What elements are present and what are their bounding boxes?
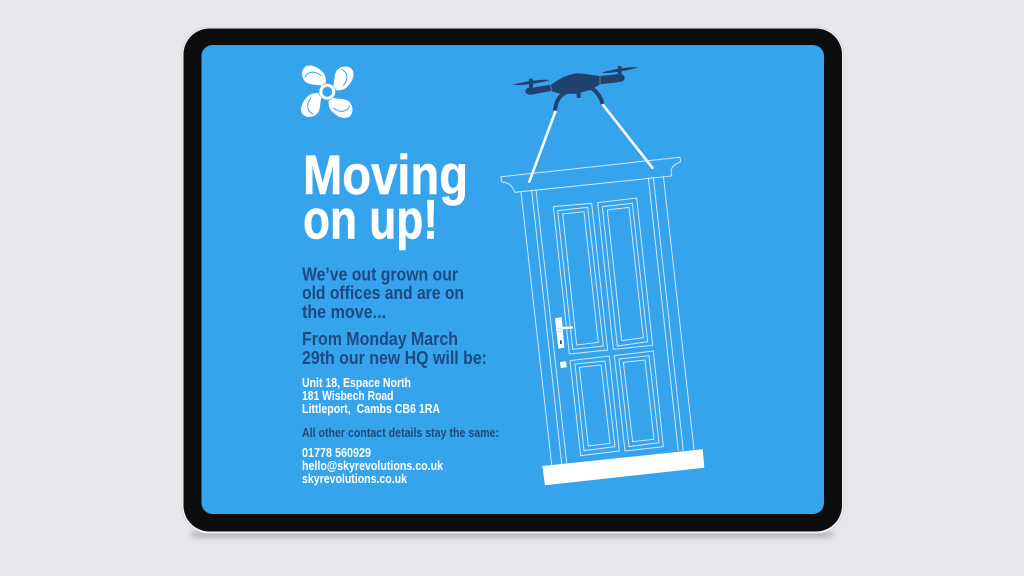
drone left rotor <box>513 79 550 88</box>
text block: contact note: All other contact details stay the same: <box>302 426 499 440</box>
text block: contact details: skyrevolutions.co.uk <box>302 472 407 486</box>
drone body <box>525 73 625 98</box>
text block: move date: 29th our new HQ will be: <box>302 348 487 368</box>
drone arm seams <box>551 76 600 91</box>
text block: address: Unit 18, Espace North <box>302 376 411 390</box>
heading: Moving <box>303 143 468 206</box>
door panels <box>553 198 663 456</box>
icon: door illustration <box>501 157 704 485</box>
door handle <box>555 317 573 349</box>
door lintel <box>501 157 681 192</box>
text block: contact details: hello@skyrevolutions.co.uk <box>302 459 443 473</box>
tablet shadow <box>192 532 832 537</box>
straps <box>529 104 652 182</box>
door frame <box>521 176 694 465</box>
drone right rotor <box>601 66 638 75</box>
text block: move date: From Monday March <box>302 329 458 349</box>
text block: move date <box>302 329 487 368</box>
icon: drone <box>513 66 638 111</box>
door knocker plate <box>560 361 567 368</box>
panel: tablet screen <box>202 45 824 514</box>
drone left leg <box>555 92 566 111</box>
text block: intro: We’ve out grown our <box>302 265 458 285</box>
text block: address <box>302 376 440 416</box>
door sill <box>542 449 704 485</box>
heading: on up! <box>303 188 438 250</box>
text block: address: Littleport, Cambs CB6 1RA <box>302 402 440 416</box>
text block: contact details <box>302 446 443 486</box>
text block: address: 181 Wisbech Road <box>302 389 394 403</box>
text block: contact details: 01778 560929 <box>302 446 371 460</box>
text block: intro: old offices and are on <box>302 283 464 303</box>
drone right leg <box>591 88 603 104</box>
text block: intro: the move... <box>302 302 386 322</box>
tablet body <box>182 28 844 534</box>
heading <box>303 143 468 250</box>
icon: company logo <box>301 66 353 118</box>
text block: intro <box>302 265 464 322</box>
